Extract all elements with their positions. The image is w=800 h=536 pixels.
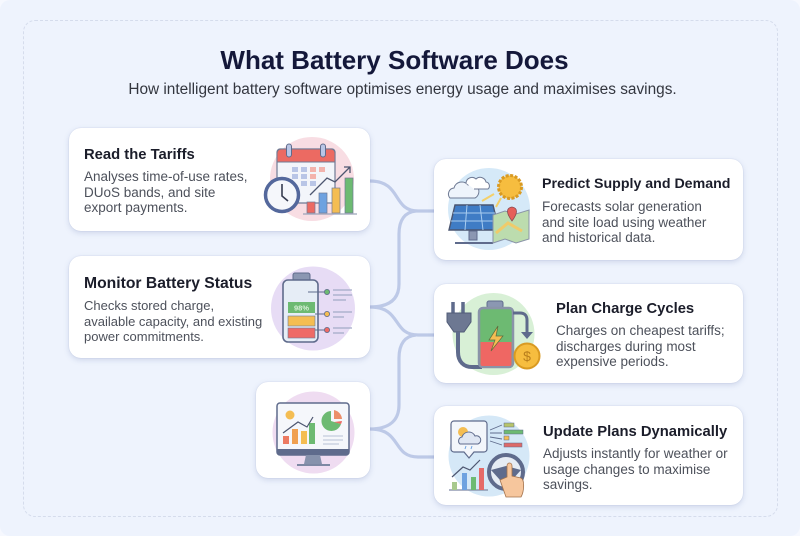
icon: plug, battery and coin: [446, 293, 540, 375]
text: read the tariffs: DUoS bands, and site: [84, 184, 215, 200]
text: plan charge cycles: discharges during most: [556, 338, 696, 354]
text: plan charge cycles: expensive periods.: [556, 354, 669, 369]
text: predict supply and demand: Forecasts solar generation: [542, 199, 702, 214]
text: update plans dynamically: usage changes to maximise: [543, 462, 710, 476]
icon: dashboard monitor: [272, 392, 354, 474]
panel: plan charge cycles: [434, 284, 743, 383]
text: plan charge cycles: [556, 323, 725, 369]
panel: read the tariffs: [69, 128, 370, 231]
subtitle: How intelligent battery software optimises energy usage and maximises savings.: [128, 81, 677, 98]
text: update plans dynamically: [543, 446, 728, 492]
panel: update plans dynamically: [434, 406, 743, 505]
heading: monitor battery status: Monitor Battery Status: [84, 275, 252, 292]
icon: plug, battery and coin: $: [523, 348, 531, 364]
panel: monitor battery status: [69, 256, 370, 358]
panel: predict supply and demand: [434, 159, 743, 260]
icon: weather, chart and steering wheel: [448, 416, 530, 498]
icon: calendar, clock and bars: [264, 137, 357, 221]
text: predict supply and demand: [542, 199, 706, 245]
icon: battery status: [271, 266, 355, 350]
text: plan charge cycles: Charges on cheapest tariffs;: [556, 323, 725, 338]
heading: read the tariffs: Read the Tariffs: [84, 147, 195, 163]
text: monitor battery status: power commitments.: [84, 329, 204, 344]
text: update plans dynamically: Adjusts instantly for weather or: [543, 446, 728, 461]
text: update plans dynamically: savings.: [543, 477, 593, 492]
heading: update plans dynamically: Update Plans Dynamically: [543, 424, 727, 440]
heading: predict supply and demand: Predict Supply and Demand: [542, 176, 730, 192]
text: read the tariffs: [84, 169, 248, 215]
text: read the tariffs: Analyses time-of-use rates,: [84, 169, 248, 184]
text: monitor battery status: available capacity, and existing: [84, 314, 262, 328]
text: predict supply and demand: and historical data.: [542, 230, 655, 245]
text: monitor battery status: Checks stored charge,: [84, 298, 214, 313]
panel: dashboard: [256, 382, 370, 478]
icon: solar panel, sun and map: [448, 168, 530, 250]
text: predict supply and demand: and site load using weather: [542, 214, 706, 230]
title: What Battery Software Does: [220, 45, 569, 75]
text: read the tariffs: export payments.: [84, 200, 188, 215]
heading: plan charge cycles: Plan Charge Cycles: [556, 301, 694, 317]
icon: battery status: 98%: [294, 304, 309, 312]
text: monitor battery status: [84, 298, 262, 344]
